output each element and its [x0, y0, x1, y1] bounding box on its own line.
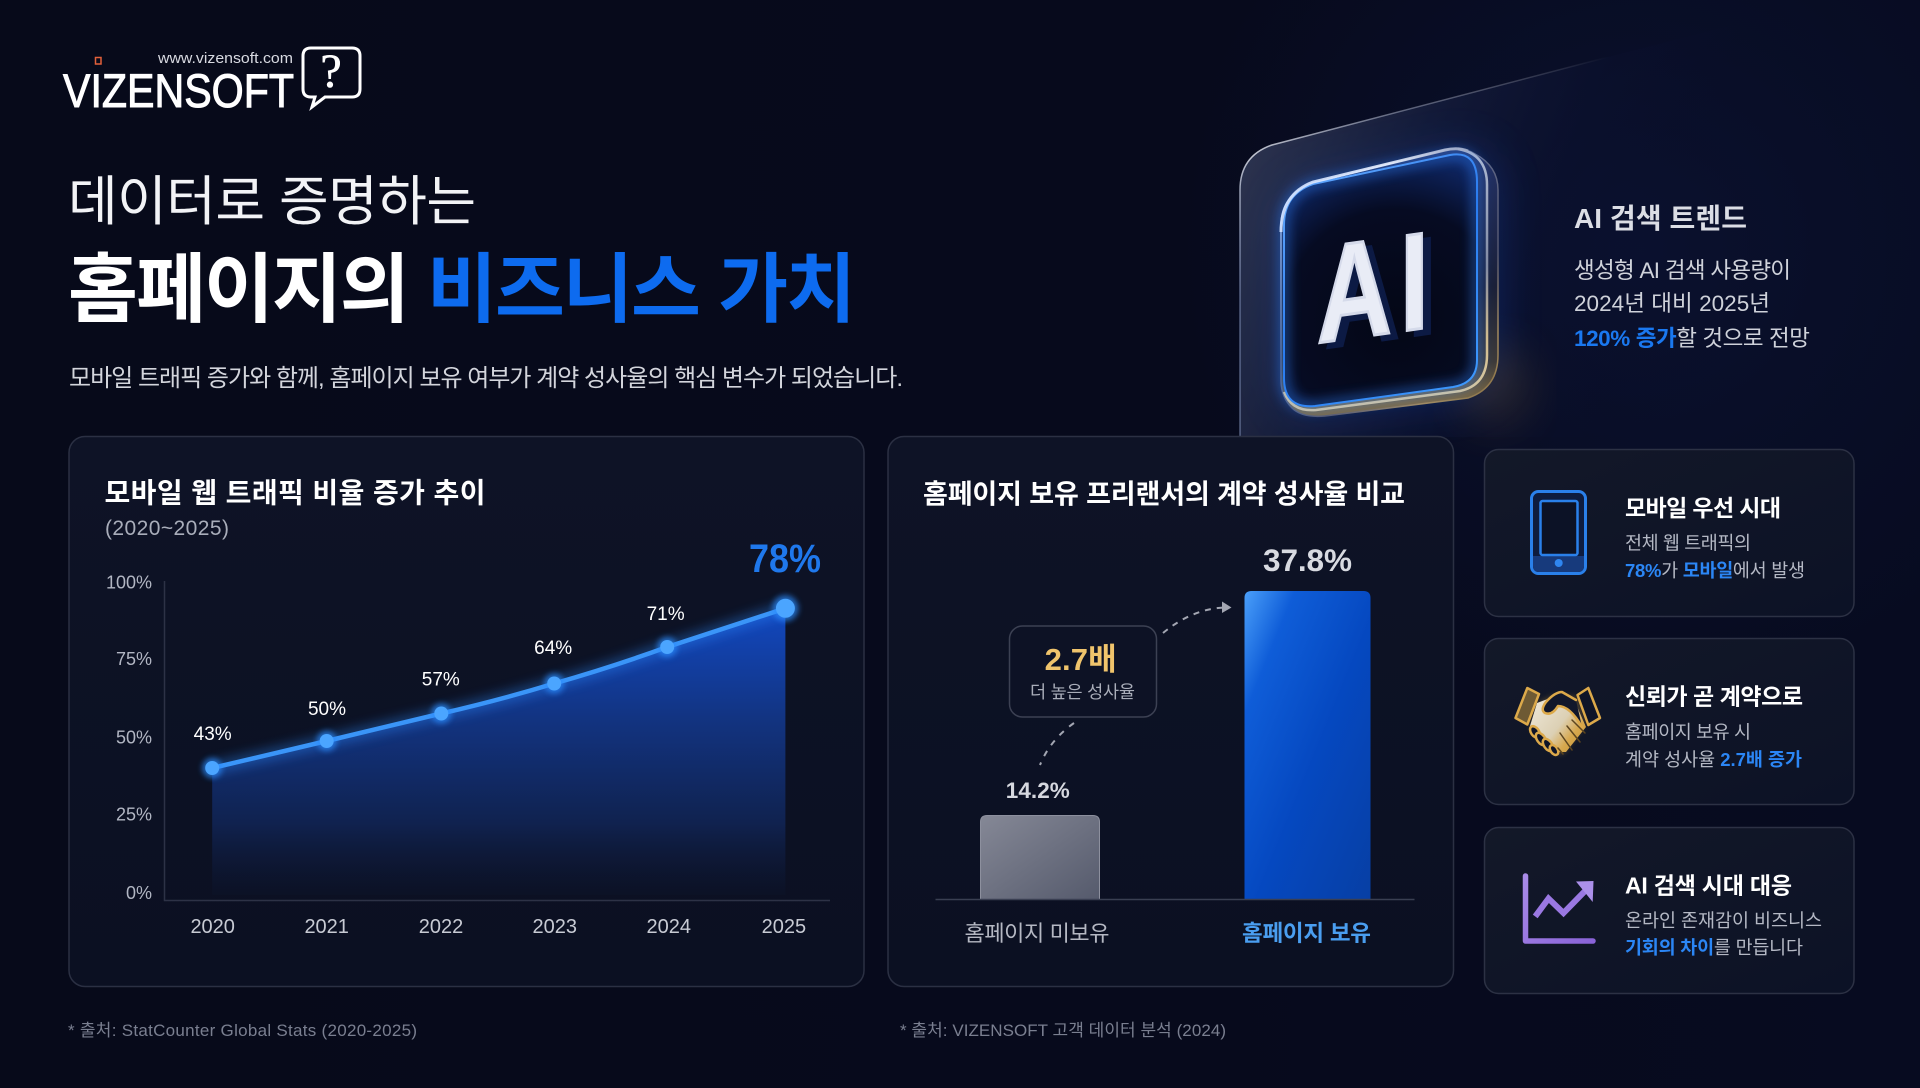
data labels: 57%: [422, 670, 460, 690]
x axis labels: [190, 916, 806, 938]
data labels: [194, 604, 685, 745]
card body: 온라인 존재감이 비즈니스: [1625, 910, 1822, 931]
AI letters: AI: [1325, 206, 1445, 377]
AI trend text block: [1574, 203, 1810, 351]
tile top highlight: [1281, 149, 1468, 232]
data labels: 64%: [534, 638, 572, 659]
data labels: 50%: [308, 699, 346, 720]
card body: 기회의 차이를 만듭니다: [1625, 937, 1803, 958]
card body: [1625, 722, 1802, 770]
icon: handshake: [1516, 688, 1600, 757]
title line 1: 데이터로 증명하는: [68, 172, 476, 232]
callout 2.7x: [1010, 626, 1156, 717]
x axis labels: 2025: [762, 916, 806, 938]
card heading: 신뢰가 곧 계약으로: [1625, 684, 1803, 710]
callout 2.7x: 더 높은 성사율: [1030, 682, 1135, 702]
AI letters: AI: [1317, 201, 1437, 372]
logo: VIZENSOFT: www.vizensoft.com: [157, 51, 293, 67]
AI trend body: 생성형 AI 검색 사용량이: [1574, 258, 1791, 283]
card body: 홈페이지 보유 시: [1625, 722, 1751, 742]
panel: contract success bar chart: [888, 436, 1454, 986]
data labels: 71%: [647, 604, 685, 625]
y axis labels: 75%: [116, 649, 152, 669]
tile face: [1284, 154, 1477, 406]
AI trend body: 120% 증가할 것으로 전망: [1574, 326, 1810, 351]
icon: speech bubble with question mark: ?: [320, 45, 342, 98]
hero: AI glass tile: [1240, 18, 1760, 437]
card: trust to contract: [1484, 638, 1854, 804]
icon: tablet: [1532, 492, 1586, 574]
card heading: AI 검색 시대 대응: [1625, 872, 1792, 898]
panel: mobile traffic line chart: [69, 436, 864, 986]
data labels: 43%: [194, 724, 232, 745]
card body: 전체 웹 트래픽의: [1625, 532, 1751, 554]
x axis labels: 2024: [647, 916, 691, 938]
card body: [1625, 532, 1805, 581]
chart heading: 모바일 웹 트래픽 비율 증가 추이: [104, 478, 486, 508]
highlight value 78%: 78%: [749, 537, 821, 581]
y axis labels: 100%: [106, 572, 152, 592]
card body: 78%가 모바일에서 발생: [1625, 560, 1805, 581]
y axis labels: [106, 572, 152, 903]
data points: [202, 595, 798, 778]
trend line: [212, 608, 785, 768]
y axis labels: 50%: [116, 728, 152, 748]
bar label without homepage: 홈페이지 미보유: [964, 921, 1110, 946]
icon: speech bubble with question mark: [303, 45, 360, 107]
bar: with homepage: [1244, 591, 1370, 900]
x axis labels: 2023: [533, 916, 577, 938]
AI trend body: 2024년 대비 2025년: [1574, 291, 1770, 316]
AI trend heading: AI 검색 트렌드: [1574, 203, 1747, 234]
card: AI search era: [1484, 828, 1854, 994]
logo: VIZENSOFT: VIZENSOFT: [63, 64, 294, 117]
area fill: [212, 608, 785, 895]
bar label with homepage: 홈페이지 보유: [1242, 921, 1371, 946]
AI trend body: [1574, 258, 1810, 351]
subtitle: 모바일 트래픽 증가와 함께, 홈페이지 보유 여부가 계약 성사율의 핵심 변수가 되었습니다.: [69, 365, 903, 392]
x axis labels: 2021: [304, 916, 349, 938]
x axis labels: 2020: [190, 916, 235, 938]
tile glowing rim: [1284, 154, 1477, 406]
card: mobile first: [1484, 450, 1854, 616]
x axis labels: 2022: [419, 916, 463, 938]
arrow: short bar to callout: [1040, 723, 1074, 765]
value 14.2%: 14.2%: [1006, 778, 1070, 803]
trend line glow: [212, 608, 785, 768]
bar chart heading: 홈페이지 보유 프리랜서의 계약 성사율 비교: [923, 480, 1405, 510]
bar: without homepage: [980, 816, 1100, 900]
tile glow: [1282, 150, 1498, 415]
card body: [1625, 910, 1822, 958]
backdrop glass panel: [1240, 18, 1760, 437]
tile body: [1281, 149, 1498, 416]
chart period: (2020~2025): [105, 517, 229, 540]
card body: 계약 성사율 2.7배 증가: [1625, 749, 1802, 770]
callout 2.7x: 2.7배: [1045, 642, 1117, 677]
y axis labels: 0%: [126, 883, 152, 903]
logo: VIZENSOFT: [63, 45, 360, 117]
value 37.8%: 37.8%: [1263, 542, 1352, 578]
source note right: * 출처: VIZENSOFT 고객 데이터 분석 (2024): [900, 1021, 1226, 1040]
icon: purple growth chart: [1526, 876, 1594, 941]
y axis labels: 25%: [116, 804, 152, 824]
arrow: callout to tall bar: [1163, 602, 1232, 633]
card heading: 모바일 우선 시대: [1625, 495, 1781, 521]
tile bevel stripe: [1284, 149, 1487, 410]
title line 2: 홈페이지의 비즈니스 가치: [68, 248, 856, 333]
source note left: * 출처: StatCounter Global Stats (2020-2025): [68, 1021, 417, 1040]
